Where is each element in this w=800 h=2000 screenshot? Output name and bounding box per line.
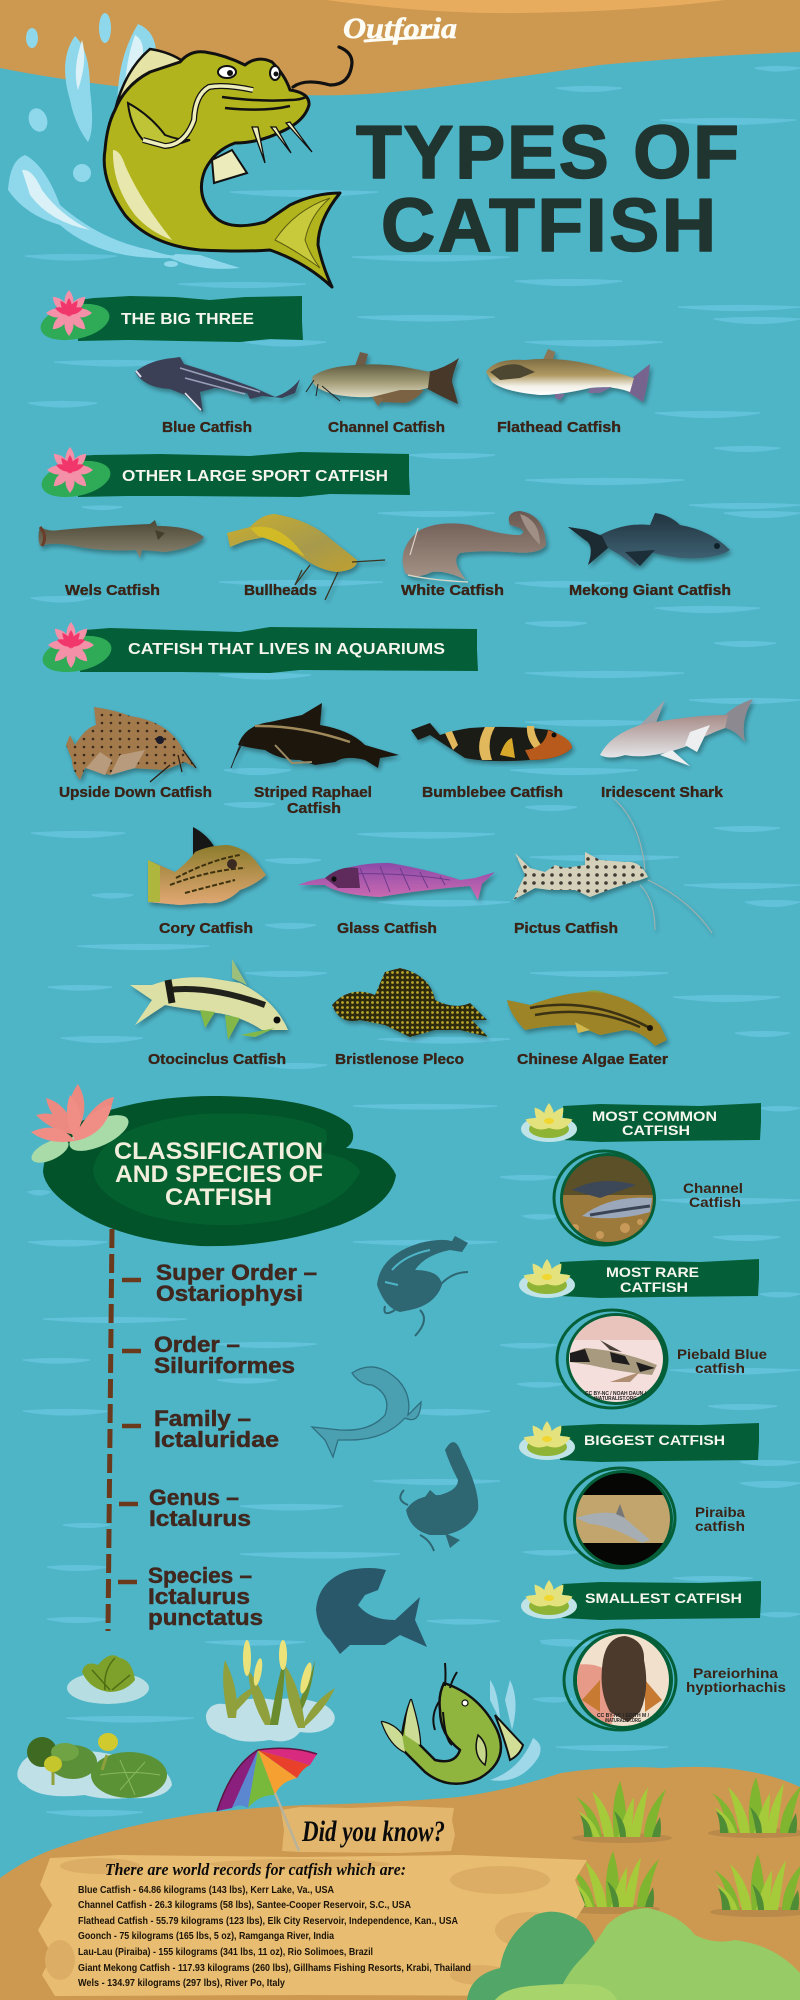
label: Bristlenose Pleco: Bristlenose Pleco xyxy=(335,1051,464,1068)
grass tufts xyxy=(560,1777,800,1917)
plant: floating leaves xyxy=(67,1655,149,1704)
label: Channel Catfish: Channel xyxy=(683,1180,743,1196)
fish: Otocinclus Catfish xyxy=(130,959,288,1040)
pectoral fin xyxy=(128,103,190,146)
label: Striped Raphael Catfish xyxy=(254,784,372,817)
silhouette fish 4 xyxy=(316,1568,427,1654)
silhouette fish 3 xyxy=(400,1442,478,1551)
taxonomy: Family: Family – xyxy=(154,1406,251,1431)
label: Mekong Giant Catfish: Mekong Giant Catfish xyxy=(569,582,731,599)
taxonomy: Super Order xyxy=(156,1260,317,1306)
label: Pictus Catfish: Pictus Catfish xyxy=(514,920,618,937)
photo: Pareiorhina hyptiorhachis: iNATURALIST.ORG xyxy=(605,1718,641,1724)
taxonomy: Genus: Ictalurus xyxy=(149,1506,251,1531)
label: White Catfish: White Catfish xyxy=(401,582,504,599)
fish: Wels Catfish xyxy=(38,520,204,558)
records list: Giant Mekong Catfish - 117.93 kilograms (260 lbs), Gillhams Fishing Resorts, Krabi, Thailand xyxy=(78,1962,471,1974)
photo: Piraiba catfish xyxy=(565,1468,675,1570)
taxonomy: Order: Siluriformes xyxy=(154,1353,295,1378)
fish: Flathead Catfish xyxy=(486,349,650,402)
heading: Most Rare Catfish: CATFISH xyxy=(620,1279,688,1295)
silhouette fish 2 xyxy=(312,1367,421,1457)
umbrella pole xyxy=(275,1793,299,1851)
records list: Channel Catfish - 26.3 kilograms (58 lbs), Santee-Cooper Reservoir, S.C., USA xyxy=(78,1899,411,1911)
eyes xyxy=(218,66,236,78)
taxonomy ticks xyxy=(118,1280,141,1582)
fish: Mekong Giant Catfish xyxy=(568,513,730,566)
label: Piraiba catfish xyxy=(695,1504,745,1534)
heading: The Big Three: THE BIG THREE xyxy=(121,311,254,328)
classification lily pad heading: AND SPECIES OF xyxy=(115,1161,323,1188)
heading: Catfish That Lives In Aquariums xyxy=(39,622,478,678)
silhouette fish 1 xyxy=(377,1236,468,1336)
photo: Piebald Blue catfish: iNATURALIST.ORG xyxy=(594,1396,637,1402)
label: Bumblebee Catfish: Bumblebee Catfish xyxy=(422,784,563,801)
heading: Most Rare Catfish: MOST RARE xyxy=(606,1264,699,1280)
lateral line xyxy=(143,86,253,146)
taxonomy: Genus: Genus – xyxy=(149,1485,239,1510)
label: Upside Down Catfish: Upside Down Catfish xyxy=(59,784,212,801)
label: Flathead Catfish: Flathead Catfish xyxy=(497,419,621,436)
title: TYPES OF xyxy=(356,110,739,194)
mouth xyxy=(222,97,306,110)
fish: Striped Raphael Catfish xyxy=(231,703,399,768)
records list: Wels - 134.97 kilograms (297 lbs), River Po, Italy xyxy=(78,1977,285,1989)
label: Bullheads: Bullheads xyxy=(244,582,317,599)
bottom sand bank xyxy=(0,1767,800,2000)
taxonomy: Order: Order – xyxy=(154,1332,240,1357)
classification lily pad heading xyxy=(28,1084,396,1246)
taxonomy: Species: punctatus xyxy=(148,1605,263,1630)
plant: reeds xyxy=(206,1640,335,1742)
records heading: There are world records for catfish which are: xyxy=(105,1860,406,1879)
heading: Biggest Catfish xyxy=(519,1421,759,1462)
heading: Most Common Catfish: CATFISH xyxy=(622,1122,690,1138)
records list xyxy=(78,1884,471,1989)
label: Iridescent Shark: Iridescent Shark xyxy=(601,784,724,801)
top light sand patch xyxy=(326,0,725,13)
taxonomy: Family xyxy=(154,1406,279,1452)
did you know plank: Did you know? xyxy=(301,1815,445,1848)
taxonomy: Species: Species – xyxy=(148,1563,252,1588)
lower fin xyxy=(212,150,247,183)
taxonomy: Super Order: Super Order – xyxy=(156,1260,317,1285)
label: Channel Catfish: Channel Catfish xyxy=(328,419,445,436)
world records panel xyxy=(38,1855,587,1996)
records list: Flathead Catfish - 55.79 kilograms (123 lbs), Elk City Reservoir, Independence, Kan., USA xyxy=(78,1915,458,1927)
title: CATFISH xyxy=(381,183,716,267)
top sand bank xyxy=(0,0,800,96)
label: Striped Raphael Catfish: Striped Raphael xyxy=(254,784,372,801)
taxonomy: Family: Ictaluridae xyxy=(154,1427,279,1452)
label: Channel Catfish: Catfish xyxy=(689,1194,741,1210)
classification lily pad heading: CLASSIFICATION xyxy=(114,1138,323,1165)
heading: Biggest Catfish: BIGGEST CATFISH xyxy=(584,1432,725,1448)
fish: Channel Catfish xyxy=(306,352,459,406)
fish: Cory Catfish xyxy=(148,827,266,905)
did you know plank xyxy=(281,1806,455,1853)
barbels xyxy=(252,122,312,163)
fish: Bullheads xyxy=(227,514,385,600)
dashed taxonomy line xyxy=(108,1229,112,1631)
logo: Outforia xyxy=(343,12,457,45)
label: Blue Catfish: Blue Catfish xyxy=(162,419,252,436)
label: Chinese Algae Eater: Chinese Algae Eater xyxy=(517,1051,668,1068)
records list: Blue Catfish - 64.86 kilograms (143 lbs), Kerr Lake, Va., USA xyxy=(78,1884,334,1896)
lotus flower xyxy=(28,1084,133,1168)
photo: Pareiorhina hyptiorhachis xyxy=(564,1630,680,1730)
heading: Other Large Sport Catfish: OTHER LARGE SPORT CATFISH xyxy=(122,468,388,485)
taxonomy: Species xyxy=(148,1563,263,1630)
taxonomy: Species: Ictalurus xyxy=(148,1584,250,1609)
heading: The Big Three xyxy=(37,290,303,346)
label: Pareiorhina hyptiorhachis xyxy=(686,1665,786,1695)
records list: Lau-Lau (Piraiba) - 155 kilograms (341 lbs, 11 oz), Rio Solimoes, Brazil xyxy=(78,1946,373,1958)
label: Pareiorhina hyptiorhachis: hyptiorhachis xyxy=(686,1679,786,1695)
heading: Smallest Catfish xyxy=(521,1580,761,1620)
plant: lily pads xyxy=(17,1733,172,1799)
fish: Blue Catfish xyxy=(135,357,300,412)
taxonomy: Genus xyxy=(149,1485,251,1531)
heading: Catfish That Lives In Aquariums: CATFISH THAT LIVES IN AQUARIUMS xyxy=(128,641,445,658)
label: Piebald Blue catfish: Piebald Blue xyxy=(677,1346,767,1362)
fish: White Catfish xyxy=(403,511,546,582)
fish: Iridescent Shark xyxy=(600,699,753,766)
heading: Most Common Catfish xyxy=(521,1103,761,1142)
records list: Goonch - 75 kilograms (165 lbs, 5 oz), Ramganga River, India xyxy=(78,1930,334,1942)
bottom catfish illustration xyxy=(382,1663,541,1784)
title xyxy=(356,110,739,267)
heading: Smallest Catfish: SMALLEST CATFISH xyxy=(585,1590,742,1606)
photo: Piebald Blue catfish: CC BY-NC / NOAH DAUN / xyxy=(585,1391,647,1397)
fish: Upside Down Catfish xyxy=(66,707,196,782)
dorsal fin xyxy=(115,49,184,110)
label: Pareiorhina hyptiorhachis: Pareiorhina xyxy=(693,1665,778,1681)
label: Piraiba catfish: catfish xyxy=(695,1518,745,1534)
taxonomy: Order xyxy=(154,1332,295,1378)
fish: Bristlenose Pleco xyxy=(332,968,488,1037)
label: Piraiba catfish: Piraiba xyxy=(695,1504,745,1520)
fish: Bumblebee Catfish xyxy=(411,723,572,761)
umbrella canopy xyxy=(217,1748,317,1811)
fish: Pictus Catfish xyxy=(513,797,712,933)
photo: Channel Catfish xyxy=(554,1150,656,1250)
taxonomy: Super Order: Ostariophysi xyxy=(156,1281,303,1306)
label: Channel Catfish xyxy=(683,1180,743,1210)
label: Striped Raphael Catfish: Catfish xyxy=(287,800,341,817)
fish: Chinese Algae Eater xyxy=(507,990,667,1046)
tail and body xyxy=(104,52,340,287)
label: Glass Catfish: Glass Catfish xyxy=(337,920,437,937)
label: Cory Catfish: Cory Catfish xyxy=(159,920,253,937)
label: Wels Catfish: Wels Catfish xyxy=(65,582,160,599)
heading: Other Large Sport Catfish xyxy=(38,447,410,503)
heading: Most Rare Catfish xyxy=(519,1259,759,1298)
classification lily pad heading: CATFISH xyxy=(165,1184,272,1211)
bushes xyxy=(467,1908,800,2000)
illustration: leaping catfish with splash xyxy=(8,13,352,287)
heading: Most Common Catfish: MOST COMMON xyxy=(592,1108,717,1124)
photo: Piebald Blue catfish xyxy=(557,1310,670,1408)
label: Piebald Blue catfish xyxy=(677,1346,767,1376)
fish: Glass Catfish xyxy=(298,863,495,900)
label: Otocinclus Catfish: Otocinclus Catfish xyxy=(148,1051,286,1068)
photo: Pareiorhina hyptiorhachis: CC BY-NC / EDITH M / xyxy=(597,1713,650,1719)
label: Piebald Blue catfish: catfish xyxy=(695,1360,745,1376)
